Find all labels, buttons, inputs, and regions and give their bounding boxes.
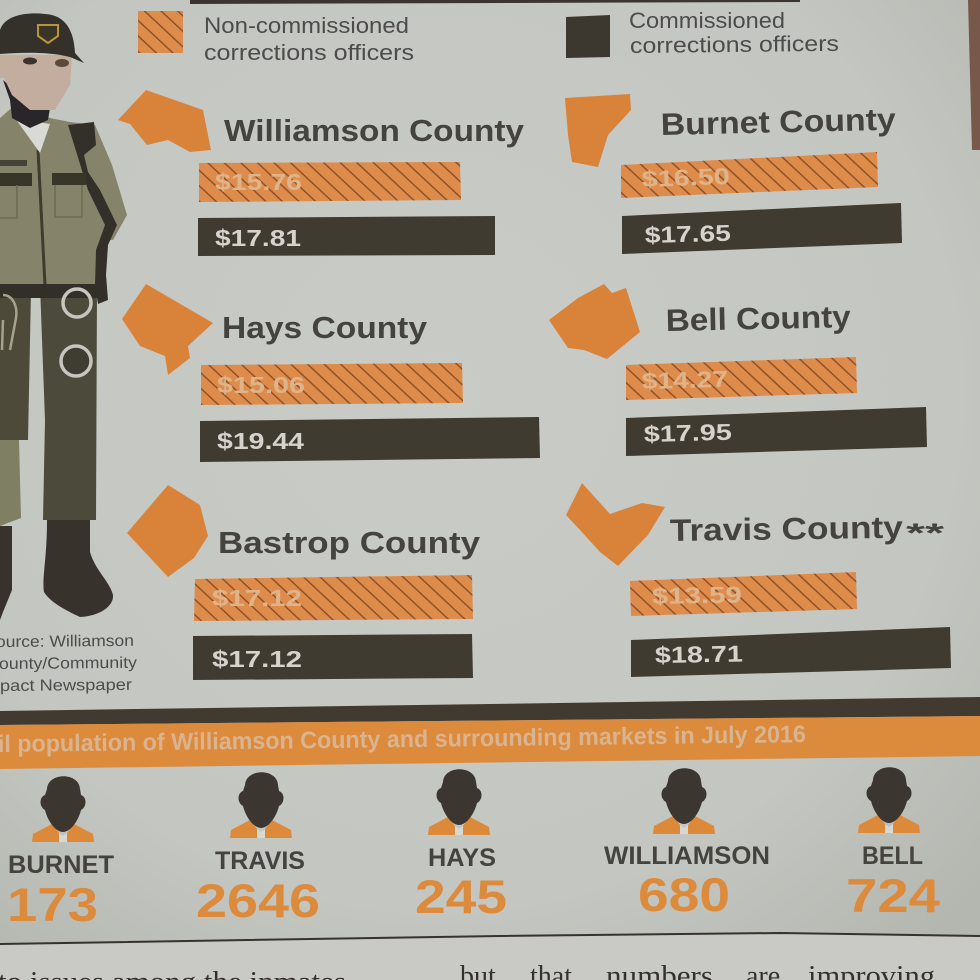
illustration: corrections officer [0,13,127,620]
placket [38,150,45,285]
eyes [23,58,37,64]
inmate: Burnet: BURNET [8,851,114,879]
panel: Travis County: $13.59 [652,581,742,609]
handcuffs [63,289,91,317]
panel: Travis County: ** [906,518,945,548]
panel: Hays County: $19.44 [217,428,304,454]
inmate: Williamson: WILLIAMSON [604,842,770,870]
undershirt [15,118,50,153]
black neck [3,80,50,128]
panel: Travis County: $18.71 [655,640,743,668]
inmate: Travis: TRAVIS [215,847,305,875]
inmate: Williamson: 680 [638,868,730,921]
panel: Bastrop County: $17.12 [212,585,302,611]
panel: Burnet County: Burnet County [660,102,897,142]
legend: commissioned: corrections officers [630,31,839,58]
shirt and sleeve [0,105,127,284]
face [0,55,72,110]
inmate: Bell: BELL [862,842,923,870]
inmate: Travis [196,772,320,927]
panel: Bastrop County [127,485,481,680]
panel: Bastrop County: Bastrop County [218,525,481,560]
inmate: Burnet [7,776,114,931]
panel: Burnet County [565,94,902,254]
legend: non-commissioned: corrections officers [204,40,414,65]
panel: Burnet County: $17.65 [644,220,731,248]
inmate: Travis: 2646 [196,874,320,927]
source note [0,633,137,695]
section header band: il population of Williamson County and surrounding markets in July 2016 [0,721,806,758]
section header band [0,697,980,769]
top rule [190,0,800,4]
panel: Hays County: $15.06 [217,372,305,398]
pockets [0,173,32,186]
lower rule and newspaper page [0,933,980,980]
far trouser leg [0,290,31,440]
panel: Bell County: $17.95 [643,419,732,447]
cap [0,13,84,63]
right edge of page [968,0,980,150]
inmate: Hays: 245 [415,870,507,923]
badge [38,25,58,43]
legend: non-commissioned: Non-commissioned [204,13,409,38]
inmate: Bell [846,767,940,922]
legend: commissioned [566,8,839,58]
panel: Williamson County: $15.76 [215,169,302,195]
panel: Bell County [549,284,927,456]
panel: Travis County [566,483,951,677]
panel: Williamson County: Williamson County [224,113,525,148]
panel: Williamson County: $17.81 [215,225,301,251]
belt [0,284,100,298]
panel: Travis County: Travis County [670,510,904,548]
source note: pact Newspaper [0,677,133,695]
inmate: Hays [415,769,507,923]
panel: Burnet County: $16.50 [641,163,730,192]
far boot [0,526,12,620]
panel: Bell County: Bell County [665,299,852,338]
inmate: Bell: 724 [846,869,940,922]
keys [2,295,16,350]
legend: non-commissioned [138,11,414,65]
panel: Hays County: Hays County [222,310,428,345]
far leg lower panel [0,440,21,526]
panel: Williamson County [118,90,525,256]
source note: ounty/Community [0,655,137,673]
inmate: Hays: HAYS [428,844,496,872]
inmate: Burnet: 173 [7,878,98,931]
strap and radio [68,122,117,304]
newspaper body text [0,961,935,980]
panel: Bell County: $14.27 [641,366,728,394]
legend: commissioned: Commissioned [629,8,785,33]
near boot [44,520,113,617]
inmate: Williamson [604,768,770,921]
panel: Hays County [122,284,540,462]
panel: Bastrop County: $17.12 [212,646,302,672]
near trouser leg [40,285,97,520]
